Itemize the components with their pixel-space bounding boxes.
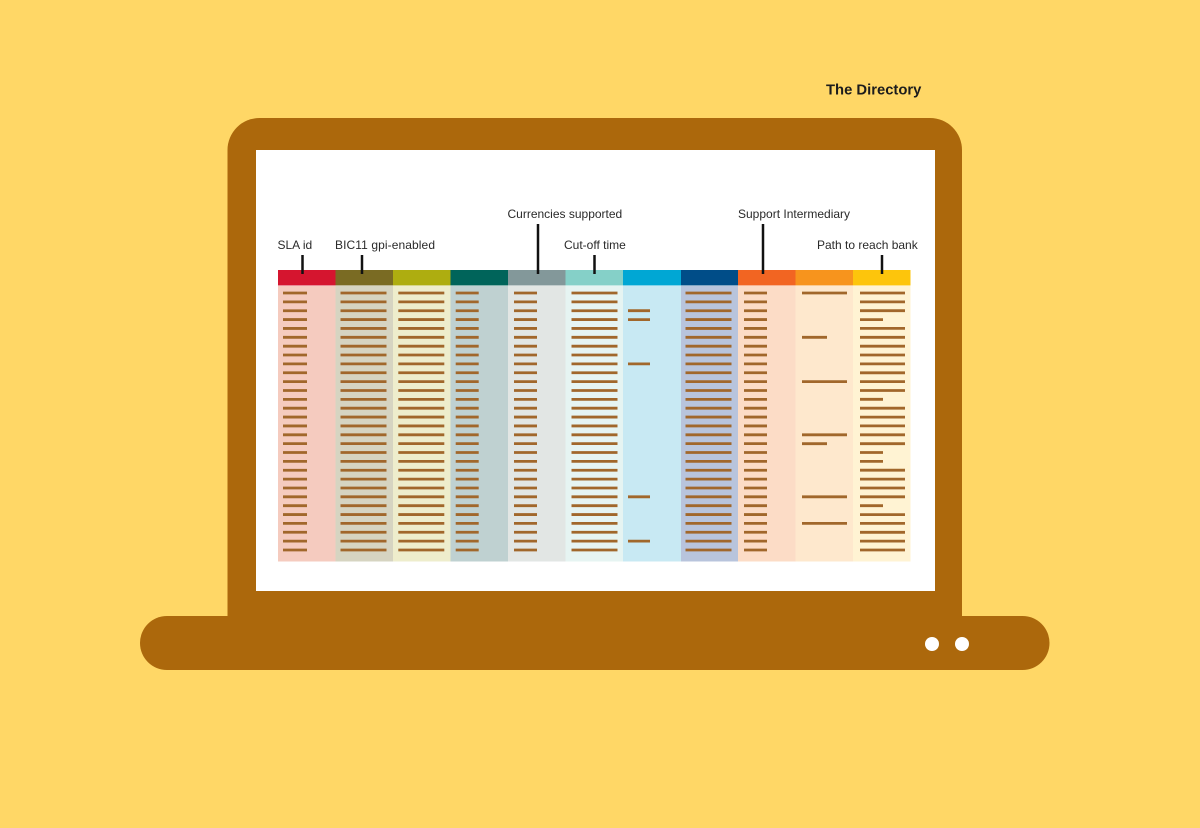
label: Support Intermediary: Support Intermediary [738,207,850,221]
title: The Directory [826,82,922,98]
label: BIC11 gpi-enabled: BIC11 gpi-enabled [335,238,435,252]
column 11: Path to reach bank [853,270,910,562]
column 10 [796,270,853,562]
column 9: Support Intermediary [738,270,796,562]
column 5: Currencies supported [508,270,566,562]
column 7 [623,270,681,562]
laptop [140,118,1050,670]
column 8 [681,270,738,562]
column 4 [450,270,508,562]
label: SLA id [278,238,312,274]
label: Path to reach bank [817,238,919,274]
directory table [278,270,910,562]
label: Cut-off time: Cut-off time [564,238,626,252]
label: Currencies supported [508,207,622,274]
label: Support Intermediary [738,207,850,274]
column 1: SLA id [278,270,336,562]
screen [256,150,935,591]
column 6: Cut-off time [566,270,623,562]
label: Cut-off time [564,238,626,274]
button: right [955,637,969,651]
label: Path to reach bank: Path to reach bank [817,238,919,252]
label: SLA id: SLA id [278,238,312,252]
button: left [925,637,939,651]
laptop base [140,616,1050,670]
laptop lid [228,118,962,630]
column 2: BIC11 gpi-enabled [336,270,393,562]
label: Currencies supported: Currencies supported [508,207,622,221]
column 3 [393,270,450,562]
label: BIC11 gpi-enabled [335,238,435,274]
